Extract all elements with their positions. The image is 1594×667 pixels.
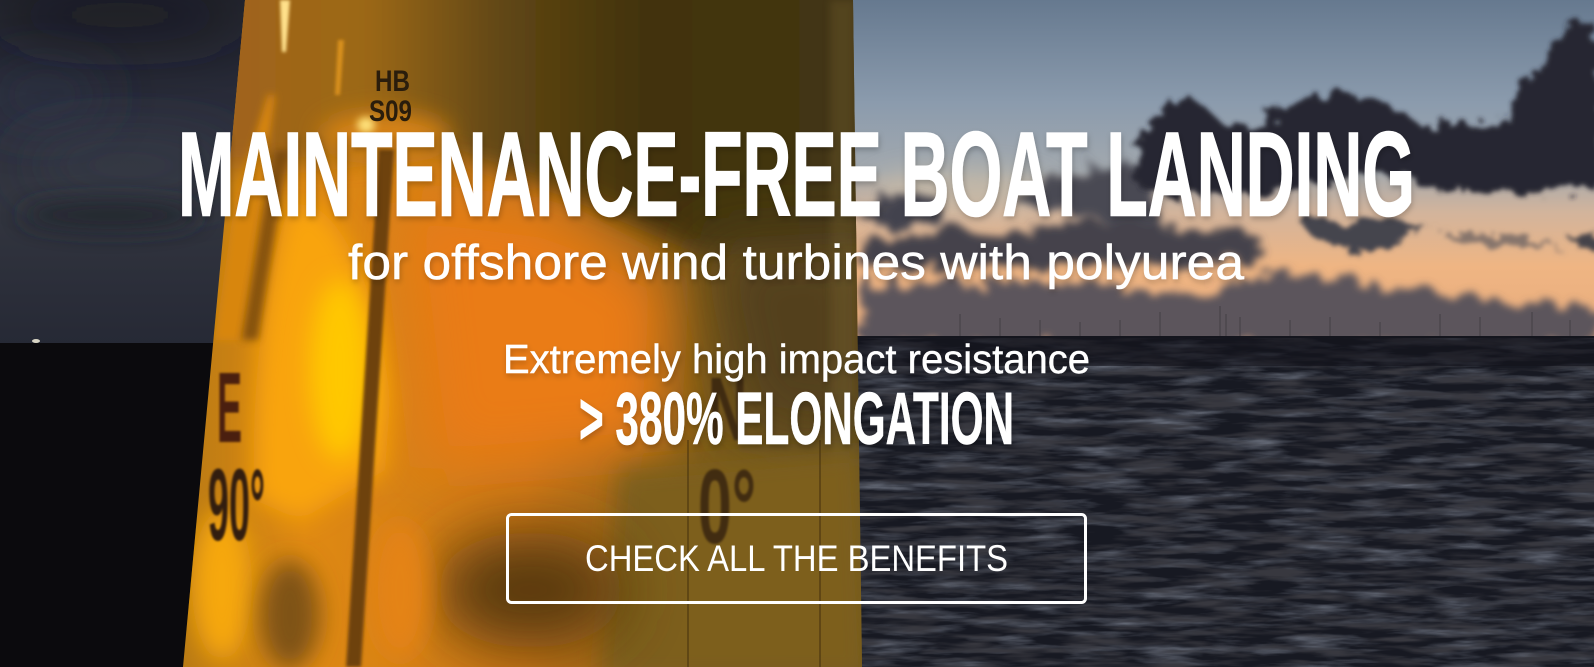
elongation stat: > 380% ELONGATION: [579, 377, 1014, 460]
reflected glow: [400, 200, 670, 470]
right sky: [845, 0, 1594, 342]
distant wind turbines: [960, 306, 1570, 338]
pole marking: HB S09: S09: [369, 95, 412, 128]
upper shaded area: [200, 0, 900, 255]
yellow monopile with sunset reflection: [180, 0, 900, 667]
impact resistance line: Extremely high impact resistance: [503, 336, 1090, 382]
right sea: [845, 336, 1594, 667]
pole marking: HB S09: [370, 70, 411, 122]
clouds: [860, 24, 1594, 345]
yellow monopile with sunset reflection: 90°: [208, 448, 265, 562]
button label: CHECK ALL THE BENEFITS: [585, 538, 1008, 579]
left sky: [0, 0, 260, 345]
subtitle: for offshore wind turbines with polyurea: [348, 236, 1245, 290]
lower shadow: [600, 450, 870, 667]
pole marking: N 0°: [699, 377, 754, 545]
left sea: [0, 339, 260, 667]
vertical dark stripe: [346, 150, 394, 667]
thin seams: [688, 440, 820, 667]
left highlights and dark band: [215, 95, 275, 340]
button: [508, 514, 1086, 602]
pole marking: E 90°: E: [217, 352, 242, 464]
pole marking: N 0°: 0°: [698, 448, 756, 566]
pole marking: E 90°: [208, 372, 265, 542]
pole marking: HB S09: HB: [375, 65, 410, 98]
pole marking: N 0°: N: [708, 360, 747, 460]
